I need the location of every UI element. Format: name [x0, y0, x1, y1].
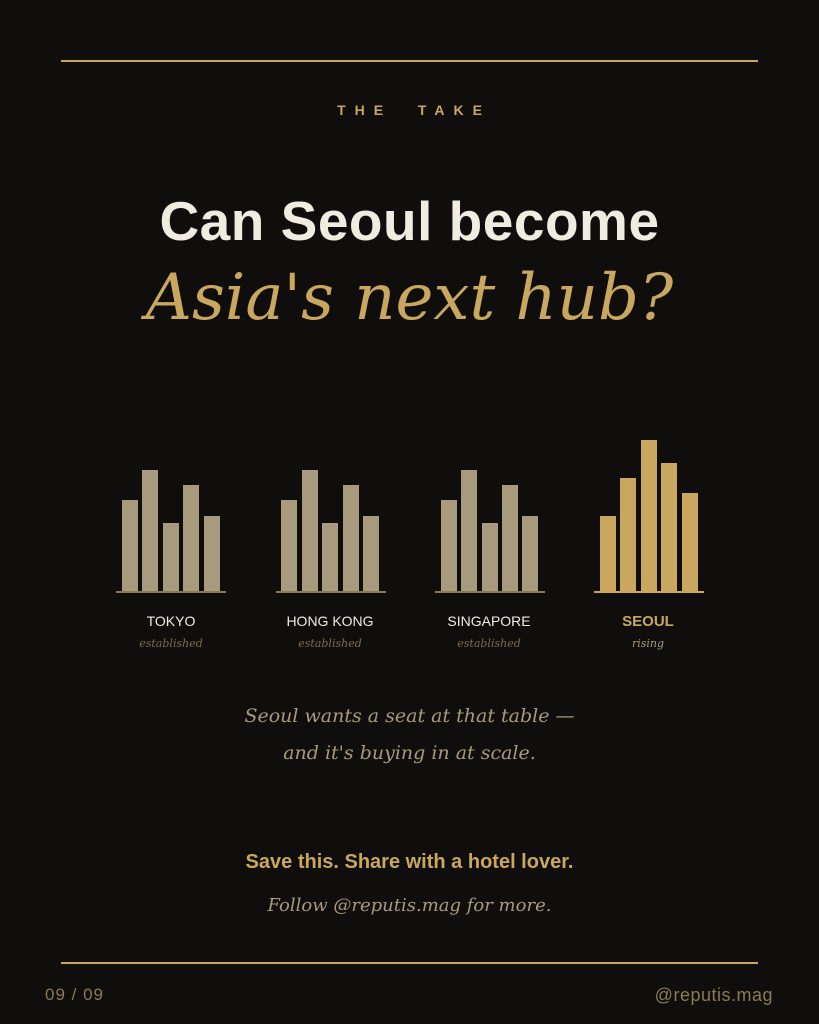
labels: Singapore	[447, 613, 531, 650]
labels: Seoul: SEOUL	[622, 613, 674, 630]
skyline: Tokyo	[116, 470, 226, 593]
title: Asia's next hub?	[146, 261, 673, 335]
handle: @reputis.mag	[655, 985, 773, 1005]
labels: Hong Kong: HONG KONG	[286, 613, 374, 629]
labels: Seoul: rising	[632, 637, 664, 650]
page number: 09 / 09	[45, 985, 104, 1004]
skyline: Seoul	[594, 440, 704, 593]
skyline: Hong Kong	[276, 470, 386, 593]
labels: Hong Kong: established	[298, 637, 362, 650]
call to action: Save this. Share with a hotel lover.	[246, 851, 573, 873]
labels: Singapore: SINGAPORE	[447, 613, 531, 629]
labels: Tokyo	[139, 613, 203, 650]
quote text	[244, 705, 575, 764]
quote text: Seoul wants a seat at that table —	[244, 705, 575, 727]
quote text: and it's buying in at scale.	[283, 742, 536, 764]
labels: Tokyo: established	[139, 637, 203, 650]
follow text: Follow @reputis.mag for more.	[268, 895, 551, 916]
eyebrow: THE TAKE: THE TAKE	[337, 102, 491, 118]
labels: Tokyo: TOKYO	[147, 613, 195, 629]
labels: Hong Kong	[286, 613, 374, 650]
chart: city skylines	[116, 440, 704, 593]
title	[140, 190, 673, 335]
title: Can Seoul become	[159, 190, 660, 252]
labels: Seoul	[622, 613, 674, 650]
labels: Singapore: established	[457, 637, 521, 650]
skyline: Singapore	[435, 470, 545, 593]
